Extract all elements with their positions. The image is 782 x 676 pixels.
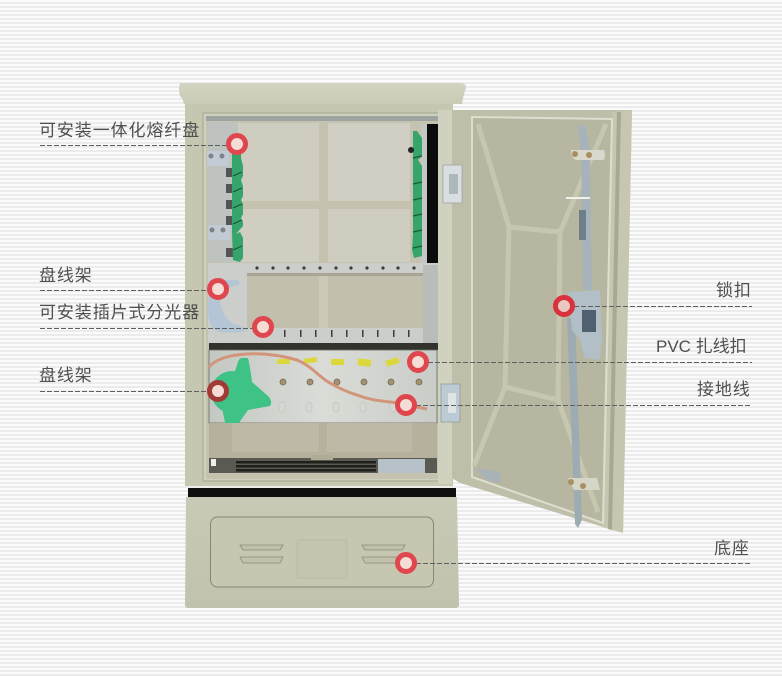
cabinet body xyxy=(185,100,453,486)
door stamped ribs xyxy=(474,124,606,512)
label: lock: 锁扣 xyxy=(716,281,752,300)
green fibre spool xyxy=(211,358,271,428)
label: fibre tray: 可安装一体化熔纤盘 xyxy=(39,121,200,140)
hotspot: base xyxy=(398,554,414,572)
lower hinge xyxy=(441,384,460,422)
base louvres xyxy=(240,545,405,563)
label: spool lower: 盘线架 xyxy=(39,366,93,385)
hotspot: lock xyxy=(556,298,572,314)
cabinet xyxy=(179,83,466,608)
door inner panel xyxy=(472,117,612,523)
right rack and black column xyxy=(408,124,438,263)
hotspot: spool upper xyxy=(210,280,226,298)
label: splitter: 可安装插片式分光器 xyxy=(39,303,200,322)
middle tray with cable slots xyxy=(208,263,438,343)
label: PVC clip: PVC 扎线扣 xyxy=(656,337,747,356)
hotspot: fibre tray xyxy=(228,136,246,152)
label: spool upper: 盘线架 xyxy=(39,266,93,285)
copper ground wire xyxy=(209,354,427,409)
base xyxy=(185,497,459,608)
lower tray xyxy=(209,350,437,423)
hotspot: ground wire xyxy=(398,396,414,414)
label: ground wire: 接地线 xyxy=(697,380,751,399)
lock body xyxy=(568,290,602,360)
base center plate xyxy=(297,540,347,578)
dark gap xyxy=(209,343,438,350)
door bracket xyxy=(476,468,501,483)
left green adapters xyxy=(232,150,243,262)
dashed leader lines xyxy=(40,146,752,564)
brass screws xyxy=(280,379,422,385)
label: base: 底座 xyxy=(714,539,750,558)
door outer shell xyxy=(452,110,632,533)
interior back wall xyxy=(206,116,439,479)
yellow cable clips xyxy=(277,357,400,367)
tray slots xyxy=(279,402,396,412)
black gap above base xyxy=(188,488,456,498)
base recessed panel xyxy=(210,517,434,587)
lock rod xyxy=(566,125,605,528)
open door xyxy=(438,110,632,533)
fibre spool bracket xyxy=(208,280,248,333)
lower interior xyxy=(209,423,437,473)
door frame xyxy=(203,113,441,481)
hotspot: spool lower xyxy=(210,382,226,400)
cabinet lid xyxy=(179,83,466,104)
hotspot: splitter xyxy=(254,318,272,336)
upper hinge xyxy=(443,165,462,203)
left mounting strip xyxy=(207,122,238,262)
door hinge side xyxy=(438,110,452,484)
hotspot: PVC clip xyxy=(410,354,426,370)
